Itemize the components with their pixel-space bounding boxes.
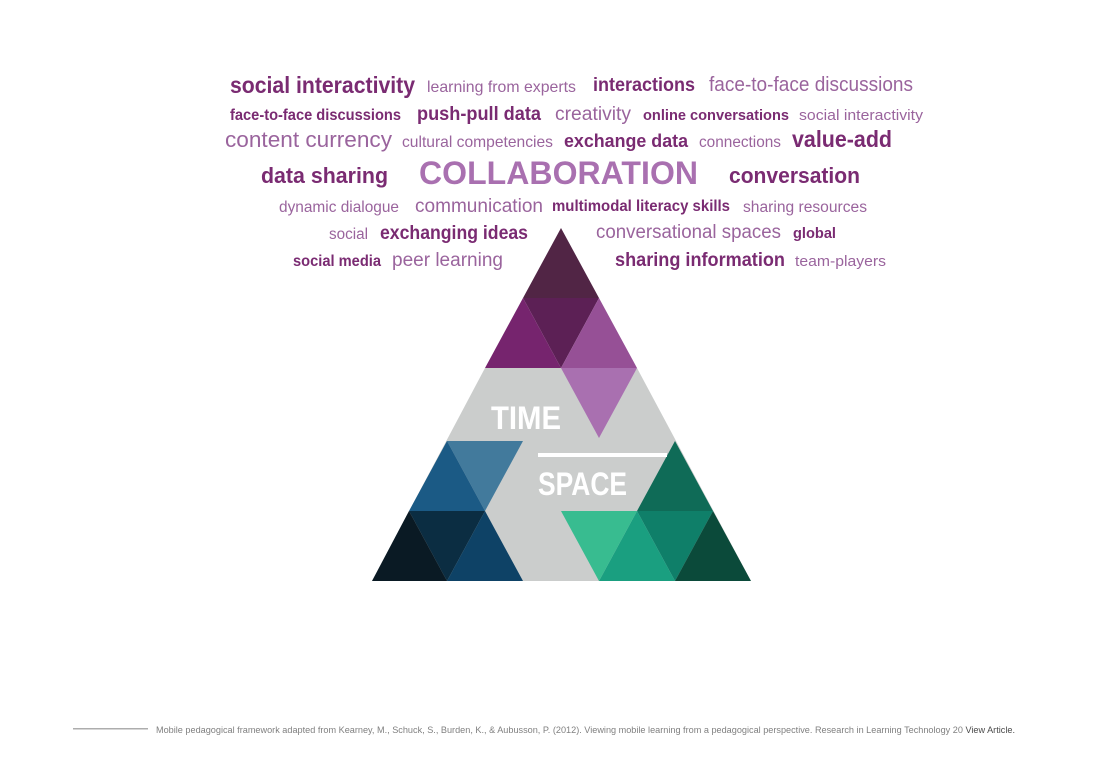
apex facet [523, 228, 599, 298]
mid facet [599, 511, 675, 581]
word: face-to-face discussions [230, 107, 401, 124]
word: cultural competencies [402, 134, 553, 151]
word: sharing information [615, 250, 785, 271]
light facet [561, 511, 637, 581]
hanging facet [561, 368, 637, 438]
inner facet [523, 298, 599, 368]
word: dynamic dialogue [279, 199, 399, 216]
word: social [329, 226, 368, 243]
word: data sharing [261, 163, 388, 188]
word: team-players [795, 253, 886, 270]
word: social interactivity [799, 107, 924, 124]
inner facet [409, 511, 485, 581]
source citation: Mobile pedagogical framework adapted from Kearney, M., Schuck, S., Burden, K., & Aubusson, P. (2012). Viewing mobile learning from a pedagogical perspective. Research in Learning Technology 20 View Article. [156, 725, 1015, 735]
corner facet [372, 511, 447, 581]
grey centre: time and space [372, 368, 751, 581]
word: push-pull data [417, 104, 541, 125]
word: sharing resources [743, 199, 867, 216]
divider bar [538, 453, 667, 457]
word: interactions [593, 75, 695, 96]
word: face-to-face discussions [709, 74, 913, 96]
green triangle cluster [561, 441, 751, 581]
left facet [485, 298, 561, 368]
word: multimodal literacy skills [552, 198, 730, 215]
word: exchanging ideas [380, 223, 528, 244]
top facet [637, 441, 713, 511]
corner facet [675, 511, 751, 581]
word: global [793, 225, 836, 242]
word: content currency [225, 127, 392, 152]
right facet [447, 511, 523, 581]
right facet [561, 298, 637, 368]
word: value-add [792, 126, 892, 152]
word: learning from experts [427, 79, 576, 96]
framework triangle diagram [372, 228, 751, 581]
light facet [447, 441, 523, 511]
word: conversational spaces [596, 222, 781, 243]
word: creativity [555, 104, 631, 125]
label: space: SPACE [538, 466, 627, 502]
word: conversation [729, 163, 860, 188]
word: social media [293, 253, 381, 270]
footer rule [73, 728, 148, 730]
word: connections [699, 134, 781, 151]
inner facet [637, 511, 713, 581]
mid facet [409, 441, 485, 511]
word: online conversations [643, 107, 789, 124]
word: peer learning [392, 250, 503, 271]
word cloud: collaboration terms [225, 72, 924, 271]
word: social interactivity [230, 72, 415, 98]
label: time: TIME [491, 400, 561, 436]
heading: collaboration: COLLABORATION [419, 155, 698, 191]
blue triangle cluster [372, 441, 523, 581]
word: exchange data [564, 130, 689, 151]
purple triangle cluster [485, 228, 637, 438]
word: communication [415, 196, 543, 217]
